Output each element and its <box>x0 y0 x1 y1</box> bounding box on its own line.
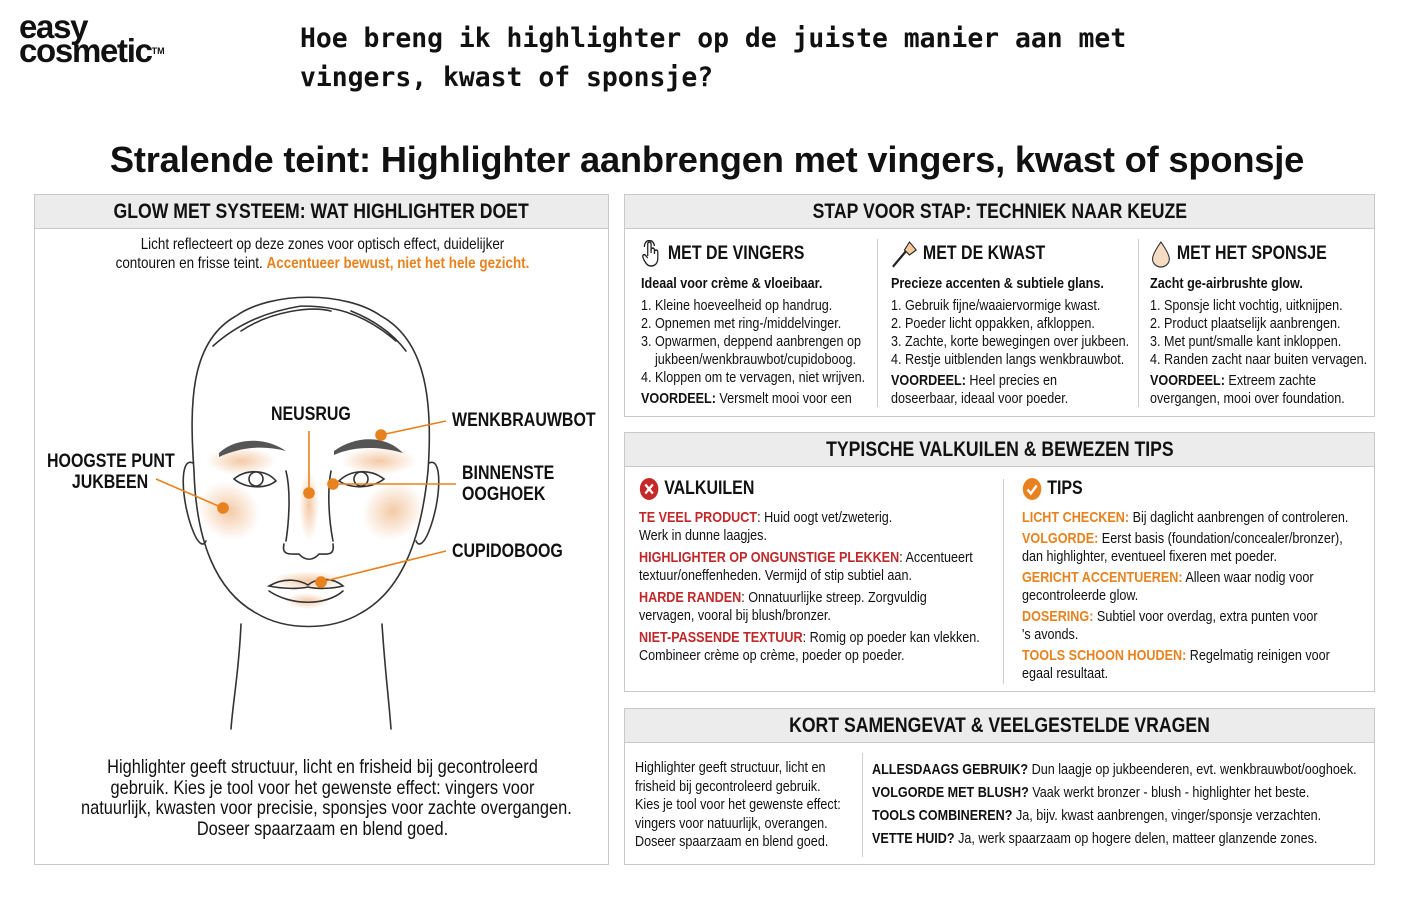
column: valkuilen: HIGHLIGHTER OP ONGUNSTIGE PLEKKEN: Accentueert <box>639 549 973 566</box>
panel: stap voor stap <box>624 194 1375 417</box>
summary text: natuurlijk, kwasten voor precisie, sponsjes voor zachte overgangen. <box>81 797 572 819</box>
panel heading <box>625 195 1374 229</box>
column: tips: TOOLS SCHOON HOUDEN: Regelmatig reinigen voor <box>1022 647 1330 664</box>
column: valkuilen: vervagen, vooral bij blush/bronzer. <box>639 607 831 624</box>
summary text: gebruik. Kies je tool voor het gewenste effect: vingers voor <box>110 776 534 798</box>
panel heading: GLOW MET SYSTEEM: WAT HIGHLIGHTER DOET <box>114 200 529 223</box>
summary: Highlighter geeft structuur, licht en <box>635 759 826 776</box>
heading: valkuilen: VALKUILEN <box>664 478 754 499</box>
panel heading <box>35 195 608 229</box>
logo <box>19 8 165 69</box>
summary text: Doseer spaarzaam en blend goed. <box>197 818 448 840</box>
column: tips: gecontroleerde glow. <box>1022 587 1138 604</box>
header question <box>300 23 1126 93</box>
intro text: contouren en frisse teint. Accentueer bewust, niet het hele gezicht. <box>116 255 529 272</box>
column: sponsje: VOORDEEL: Extreem zachte <box>1150 372 1316 389</box>
summary text: Highlighter geeft structuur, licht en frisheid bij gecontroleerd <box>107 756 538 778</box>
label: hoogste punt jukbeen: JUKBEEN <box>72 472 148 493</box>
column: kwast: 4. Restje uitblenden langs wenkbrauwbot. <box>891 351 1124 368</box>
column: sponsje: MET HET SPONSJE <box>1177 243 1327 264</box>
column: sponsje: Zacht ge-airbrushte glow. <box>1150 275 1303 292</box>
column: vingers: Ideaal voor crème & vloeibaar. <box>641 275 822 292</box>
label: binnenste ooghoek: OOGHOEK <box>462 484 545 505</box>
column: vingers: jukbeen/wenkbrauwbot/cupidoboog. <box>655 351 856 368</box>
panel heading: TYPISCHE VALKUILEN & BEWEZEN TIPS <box>826 438 1173 461</box>
intro text: Licht reflecteert op deze zones voor optisch effect, duidelijker <box>141 236 504 253</box>
heading: tips <box>1022 478 1083 500</box>
faq <box>872 761 1357 847</box>
panel: valkuilen & tips <box>624 432 1375 692</box>
column: vingers: MET DE VINGERS <box>668 243 804 264</box>
title: Stralende teint: Highlighter aanbrengen met vingers, kwast of sponsje <box>110 139 1304 180</box>
face illustration <box>156 296 456 730</box>
label: neusrug: NEUSRUG <box>271 404 351 425</box>
panel heading <box>625 433 1374 467</box>
column: sponsje: 3. Met punt/smalle kant inkloppen. <box>1150 333 1341 350</box>
panel heading <box>625 709 1374 743</box>
column: vingers <box>641 240 865 407</box>
label: binnenste ooghoek <box>462 463 554 505</box>
label: binnenste ooghoek: BINNENSTE <box>462 463 554 484</box>
column: vingers: 4. Kloppen om te vervagen, niet wrijven. <box>641 369 865 386</box>
column: kwast: 1. Gebruik fijne/waaiervormige kwast. <box>891 297 1100 314</box>
faq: ALLESDAAGS GEBRUIK? Dun laagje op jukbeenderen, evt. wenkbrauwbot/ooghoek. <box>872 761 1357 778</box>
column: tips: egaal resultaat. <box>1022 665 1108 682</box>
column: sponsje: overgangen, mooi over foundation. <box>1150 390 1345 407</box>
panel: samenvatting & faq <box>624 708 1375 865</box>
column: kwast: 3. Zachte, korte bewegingen over jukbeen. <box>891 333 1129 350</box>
column: tips <box>1022 478 1348 682</box>
column: valkuilen: HARDE RANDEN: Onnatuurlijke streep. Zorgvuldig <box>639 589 927 606</box>
header question: vingers, kwast of sponsje? <box>300 62 713 93</box>
column: valkuilen: textuur/oneffenheden. Vermijd of stip subtiel aan. <box>639 567 912 584</box>
logo: easy <box>19 8 87 45</box>
column: tips: GERICHT ACCENTUEREN: Alleen waar nodig voor <box>1022 569 1314 586</box>
column: vingers: 3. Opwarmen, deppend aanbrengen op <box>641 333 861 350</box>
label: hoogste punt jukbeen <box>47 451 175 493</box>
column: valkuilen: Werk in dunne laagjes. <box>639 527 767 544</box>
faq: VOLGORDE MET BLUSH? Vaak werkt bronzer - blush - highlighter het beste. <box>872 784 1309 801</box>
column: kwast: 2. Poeder licht oppakken, afkloppen. <box>891 315 1095 332</box>
column: vingers: 2. Opnemen met ring-/middelvinger. <box>641 315 841 332</box>
column: tips: DOSERING: Subtiel voor overdag, extra punten voor <box>1022 608 1318 625</box>
panel heading: STAP VOOR STAP: TECHNIEK NAAR KEUZE <box>812 200 1187 223</box>
column: tips: VOLGORDE: Eerst basis (foundation/concealer/bronzer), <box>1022 530 1343 547</box>
summary: frisheid bij gecontroleerd gebruik. <box>635 778 821 794</box>
column: kwast: doseerbaar, ideaal voor poeder. <box>891 390 1068 407</box>
faq: VETTE HUID? Ja, werk spaarzaam op hogere delen, matteer glanzende zones. <box>872 830 1317 847</box>
heading: tips: TIPS <box>1047 478 1083 499</box>
header question: Hoe breng ik highlighter op de juiste manier aan met <box>300 23 1126 54</box>
column: sponsje: 2. Product plaatselijk aanbrengen. <box>1150 315 1341 332</box>
label: hoogste punt jukbeen: HOOGSTE PUNT <box>47 451 175 472</box>
column: sponsje: 1. Sponsje licht vochtig, uitknijpen. <box>1150 297 1343 314</box>
column: sponsje <box>1150 241 1367 407</box>
column: kwast <box>891 241 1129 407</box>
summary: vingers voor natuurlijk, overangen. <box>635 814 828 832</box>
faq: TOOLS COMBINEREN? Ja, bijv. kwast aanbrengen, vinger/sponsje verzachten. <box>872 807 1321 824</box>
column: valkuilen <box>639 478 980 664</box>
column: kwast: Precieze accenten & subtiele glans. <box>891 275 1104 292</box>
column: sponsje: 4. Randen zacht naar buiten vervagen. <box>1150 351 1367 368</box>
column: tips: LICHT CHECKEN: Bij daglicht aanbrengen of controleren. <box>1022 509 1348 526</box>
summary <box>635 759 841 850</box>
column: tips: 's avonds. <box>1022 626 1078 643</box>
column: vingers: 1. Kleine hoeveelheid op handrug. <box>641 297 832 314</box>
intro text <box>116 236 529 272</box>
label: cupidoboog: CUPIDOBOOG <box>452 541 563 562</box>
label: wenkbrauwbot: WENKBRAUWBOT <box>452 410 596 431</box>
column: kwast: VOORDEEL: Heel precies en <box>891 372 1057 389</box>
column: valkuilen: TE VEEL PRODUCT: Huid oogt vet/zweterig. <box>639 509 892 526</box>
panel heading: KORT SAMENGEVAT & VEELGESTELDE VRAGEN <box>789 714 1210 737</box>
summary: Kies je tool voor het gewenste effect: <box>635 796 841 813</box>
column: tips: dan highlighter, eventueel fixeren met poeder. <box>1022 548 1277 565</box>
logo: cosmeticTM <box>19 32 165 69</box>
column: kwast: MET DE KWAST <box>923 243 1045 264</box>
column: valkuilen: Combineer crème op crème, poeder op poeder. <box>639 647 904 664</box>
column: vingers: VOORDEEL: Versmelt mooi voor een <box>641 390 852 407</box>
summary text <box>81 756 572 840</box>
panel: glow met systeem <box>34 194 609 865</box>
column: valkuilen: NIET-PASSENDE TEXTUUR: Romig op poeder kan vlekken. <box>639 629 980 646</box>
summary: Doseer spaarzaam en blend goed. <box>635 833 828 850</box>
